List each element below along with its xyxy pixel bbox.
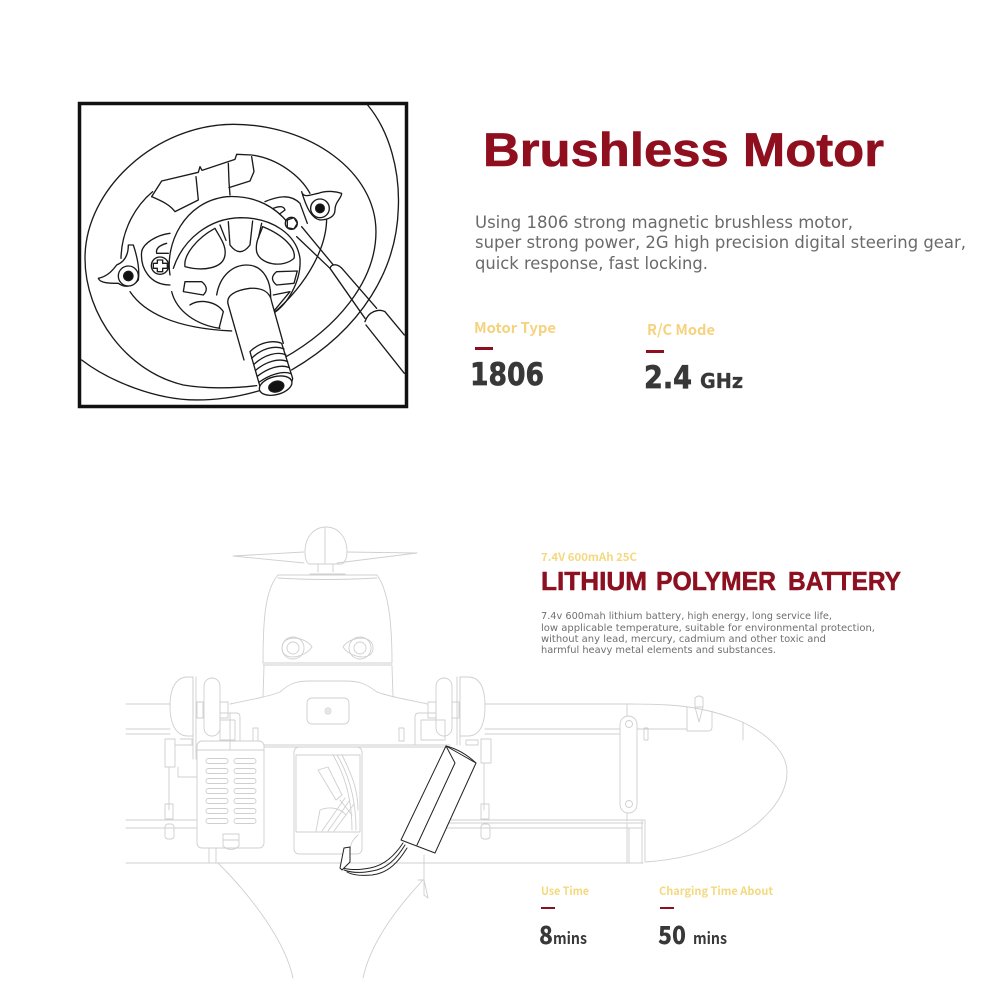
stat: charging time: [658, 883, 773, 952]
stat: use time: Use Time: [541, 883, 589, 899]
stat: motor type: 1806: [470, 357, 544, 393]
icon: battery pack: [340, 746, 476, 875]
stat: charging time: mins: [693, 925, 727, 949]
text block: battery description: without any lead, mercury, cadmium and other toxic and: [541, 634, 826, 645]
illustration: aircraft underside with battery: [126, 527, 787, 978]
wing centre and hatch: [230, 681, 427, 724]
stat: R/C mode: GHz: [700, 369, 743, 393]
text: battery spec line: 7.4V 600mAh 25C: [541, 549, 637, 565]
heading: Lithium Polymer Battery: [541, 568, 901, 596]
stat: use time: [539, 883, 589, 952]
stat: use time: 8: [539, 916, 553, 952]
battery cover: [197, 713, 264, 850]
heading: Brushless Motor: Brushless Motor: [483, 123, 884, 176]
illustration frame: [80, 104, 406, 406]
motor line drawing: [82, 105, 404, 400]
stat: charging time: Charging Time About: [659, 883, 773, 899]
heading: Lithium Polymer Battery: POLYMER: [656, 568, 776, 596]
text block: motor description: quick response, fast locking.: [475, 254, 708, 273]
stat: R/C mode: R/C Mode: [647, 319, 715, 340]
panel: brushless motor illustration: [80, 104, 406, 406]
text block: motor description: Using 1806 strong magnetic brushless motor,: [475, 213, 853, 232]
text block: battery description: harmful heavy metal elements and substances.: [541, 645, 776, 656]
control linkages: [165, 739, 491, 839]
battery compartment with wiring: [294, 747, 362, 854]
stat: charging time: 50: [658, 916, 686, 952]
text block: battery description: [541, 611, 875, 656]
heading: Lithium Polymer Battery: BATTERY: [788, 568, 901, 596]
text block: motor description: super strong power, 2G high precision digital steering gear,: [475, 233, 966, 252]
text block: motor description: [475, 213, 966, 273]
heading: Lithium Polymer Battery: LITHIUM: [541, 568, 647, 596]
landing wheels: [170, 677, 485, 759]
text block: battery description: low applicable temperature, suitable for environmental protection,: [541, 623, 875, 634]
stat: motor type: [470, 317, 556, 393]
motor pod: [263, 575, 393, 697]
fuselage lines: [126, 696, 787, 978]
stat: use time: mins: [553, 925, 587, 949]
text block: battery description: 7.4v 600mah lithium battery, high energy, long service life,: [541, 611, 832, 622]
propeller: [233, 527, 417, 574]
stat: R/C mode: 2.4: [644, 360, 692, 396]
stat: motor type: Motor Type: [474, 317, 556, 338]
stat: R/C mode: [644, 319, 743, 396]
